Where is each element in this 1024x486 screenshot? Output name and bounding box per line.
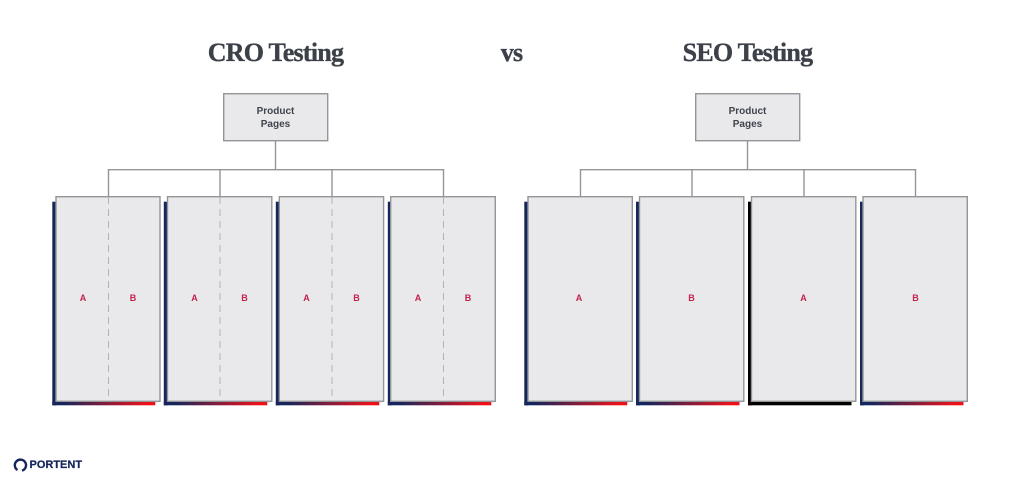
card 3: A/B split bbox=[276, 197, 384, 405]
card 4: B: B bbox=[912, 293, 919, 303]
card 1: A/B split: B bbox=[130, 293, 137, 303]
panel: CRO testing diagram bbox=[52, 94, 495, 405]
logo: Portent: PORTENT bbox=[30, 459, 82, 471]
card 1: A: A bbox=[576, 293, 583, 303]
box: Product Pages (SEO): Product bbox=[729, 106, 767, 117]
card 4: A/B split: B bbox=[465, 293, 472, 303]
card 3: A/B split: A bbox=[303, 293, 310, 303]
card 4: A/B split bbox=[388, 197, 495, 405]
card 2: B bbox=[636, 197, 744, 405]
card 3: A (black shadow): A bbox=[800, 293, 807, 303]
box: Product Pages (SEO) bbox=[696, 94, 800, 141]
icon: Portent ring bbox=[15, 460, 26, 471]
title: vs: vs bbox=[501, 38, 523, 67]
card 4: A/B split: A bbox=[415, 293, 422, 303]
card 2: A/B split bbox=[164, 197, 272, 405]
card 2: B: B bbox=[688, 293, 695, 303]
card 2: A/B split: A bbox=[191, 293, 198, 303]
card 1: A bbox=[524, 197, 632, 405]
box: Product Pages (CRO): Product bbox=[257, 106, 295, 117]
card 3: A (black shadow) bbox=[748, 197, 856, 405]
box: Product Pages (CRO) bbox=[224, 94, 328, 141]
card 1: A/B split: A bbox=[80, 293, 87, 303]
card 4: B bbox=[860, 197, 967, 405]
connector lines (SEO) bbox=[580, 141, 916, 197]
card 2: A/B split: B bbox=[241, 293, 248, 303]
box: Product Pages (SEO): Pages bbox=[733, 119, 763, 130]
card 3: A/B split: B bbox=[353, 293, 360, 303]
title: SEO Testing: SEO Testing bbox=[683, 38, 813, 67]
panel: SEO testing diagram bbox=[524, 94, 967, 405]
title: CRO Testing: CRO Testing bbox=[208, 38, 344, 67]
box: Product Pages (CRO): Pages bbox=[261, 119, 291, 130]
card 1: A/B split bbox=[52, 197, 160, 405]
connector lines (CRO) bbox=[108, 141, 444, 197]
